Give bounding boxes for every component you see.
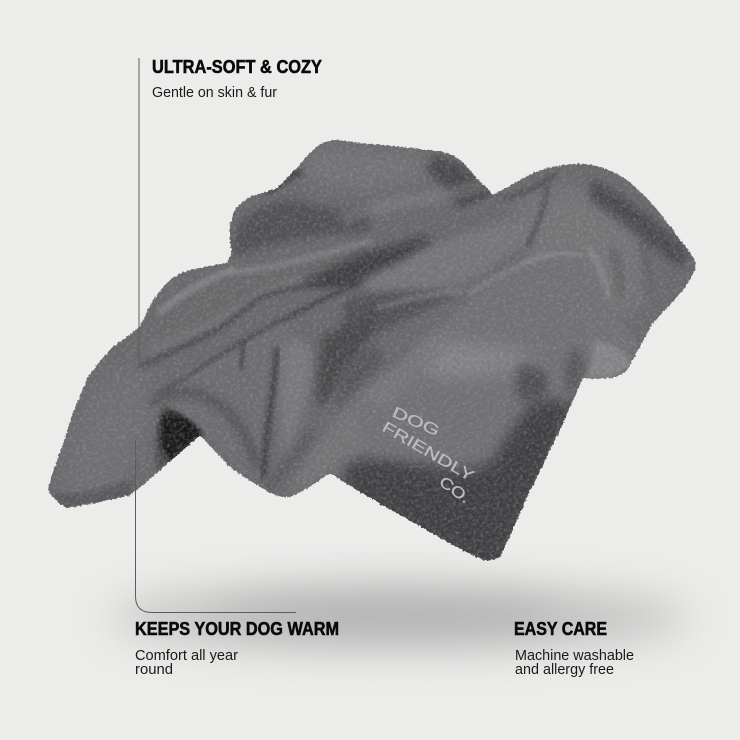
text block: keeps your dog warm: KEEPS YOUR DOG WARM: [135, 619, 339, 639]
middle band: [340, 222, 522, 340]
embroidered logo: [379, 404, 477, 507]
text block: ultra-soft and cozy: [152, 57, 322, 101]
floor shadow: [110, 588, 690, 648]
connector line top: [138, 58, 140, 367]
embroidered logo: DOG: [389, 404, 442, 440]
right panel: [505, 175, 690, 320]
lower left hem: [54, 480, 134, 508]
upper mass: [232, 148, 495, 258]
text block: ultra-soft and cozy: ULTRA-SOFT & COZY: [152, 57, 322, 77]
text block: keeps your dog warm: round: [135, 662, 173, 678]
text block: keeps your dog warm: [135, 619, 339, 678]
text block: keeps your dog warm: Comfort all year: [135, 648, 238, 664]
blanket: [48, 140, 696, 561]
left slab: [76, 364, 155, 482]
embroidered logo: CO.: [436, 473, 473, 507]
dark hem: [340, 400, 575, 570]
blanket body: [48, 140, 696, 561]
front flap: [335, 252, 640, 463]
front fold arc: [164, 322, 284, 480]
left fold underside: [155, 405, 205, 475]
text block: ultra-soft and cozy: Gentle on skin & fur: [152, 85, 277, 101]
text block: easy care: EASY CARE: [514, 619, 607, 639]
text block: easy care: Machine washable: [515, 648, 634, 664]
central column: [264, 319, 372, 493]
ridge A: [106, 202, 484, 355]
crease lines: [140, 243, 430, 405]
connector line bottom: [136, 440, 296, 612]
text block: easy care: and allergy free: [515, 662, 614, 678]
fur light texture: [48, 140, 696, 560]
embroidered logo: FRIENDLY: [379, 419, 477, 485]
text block: easy care: [514, 619, 634, 678]
fur dark texture: [52, 141, 688, 560]
